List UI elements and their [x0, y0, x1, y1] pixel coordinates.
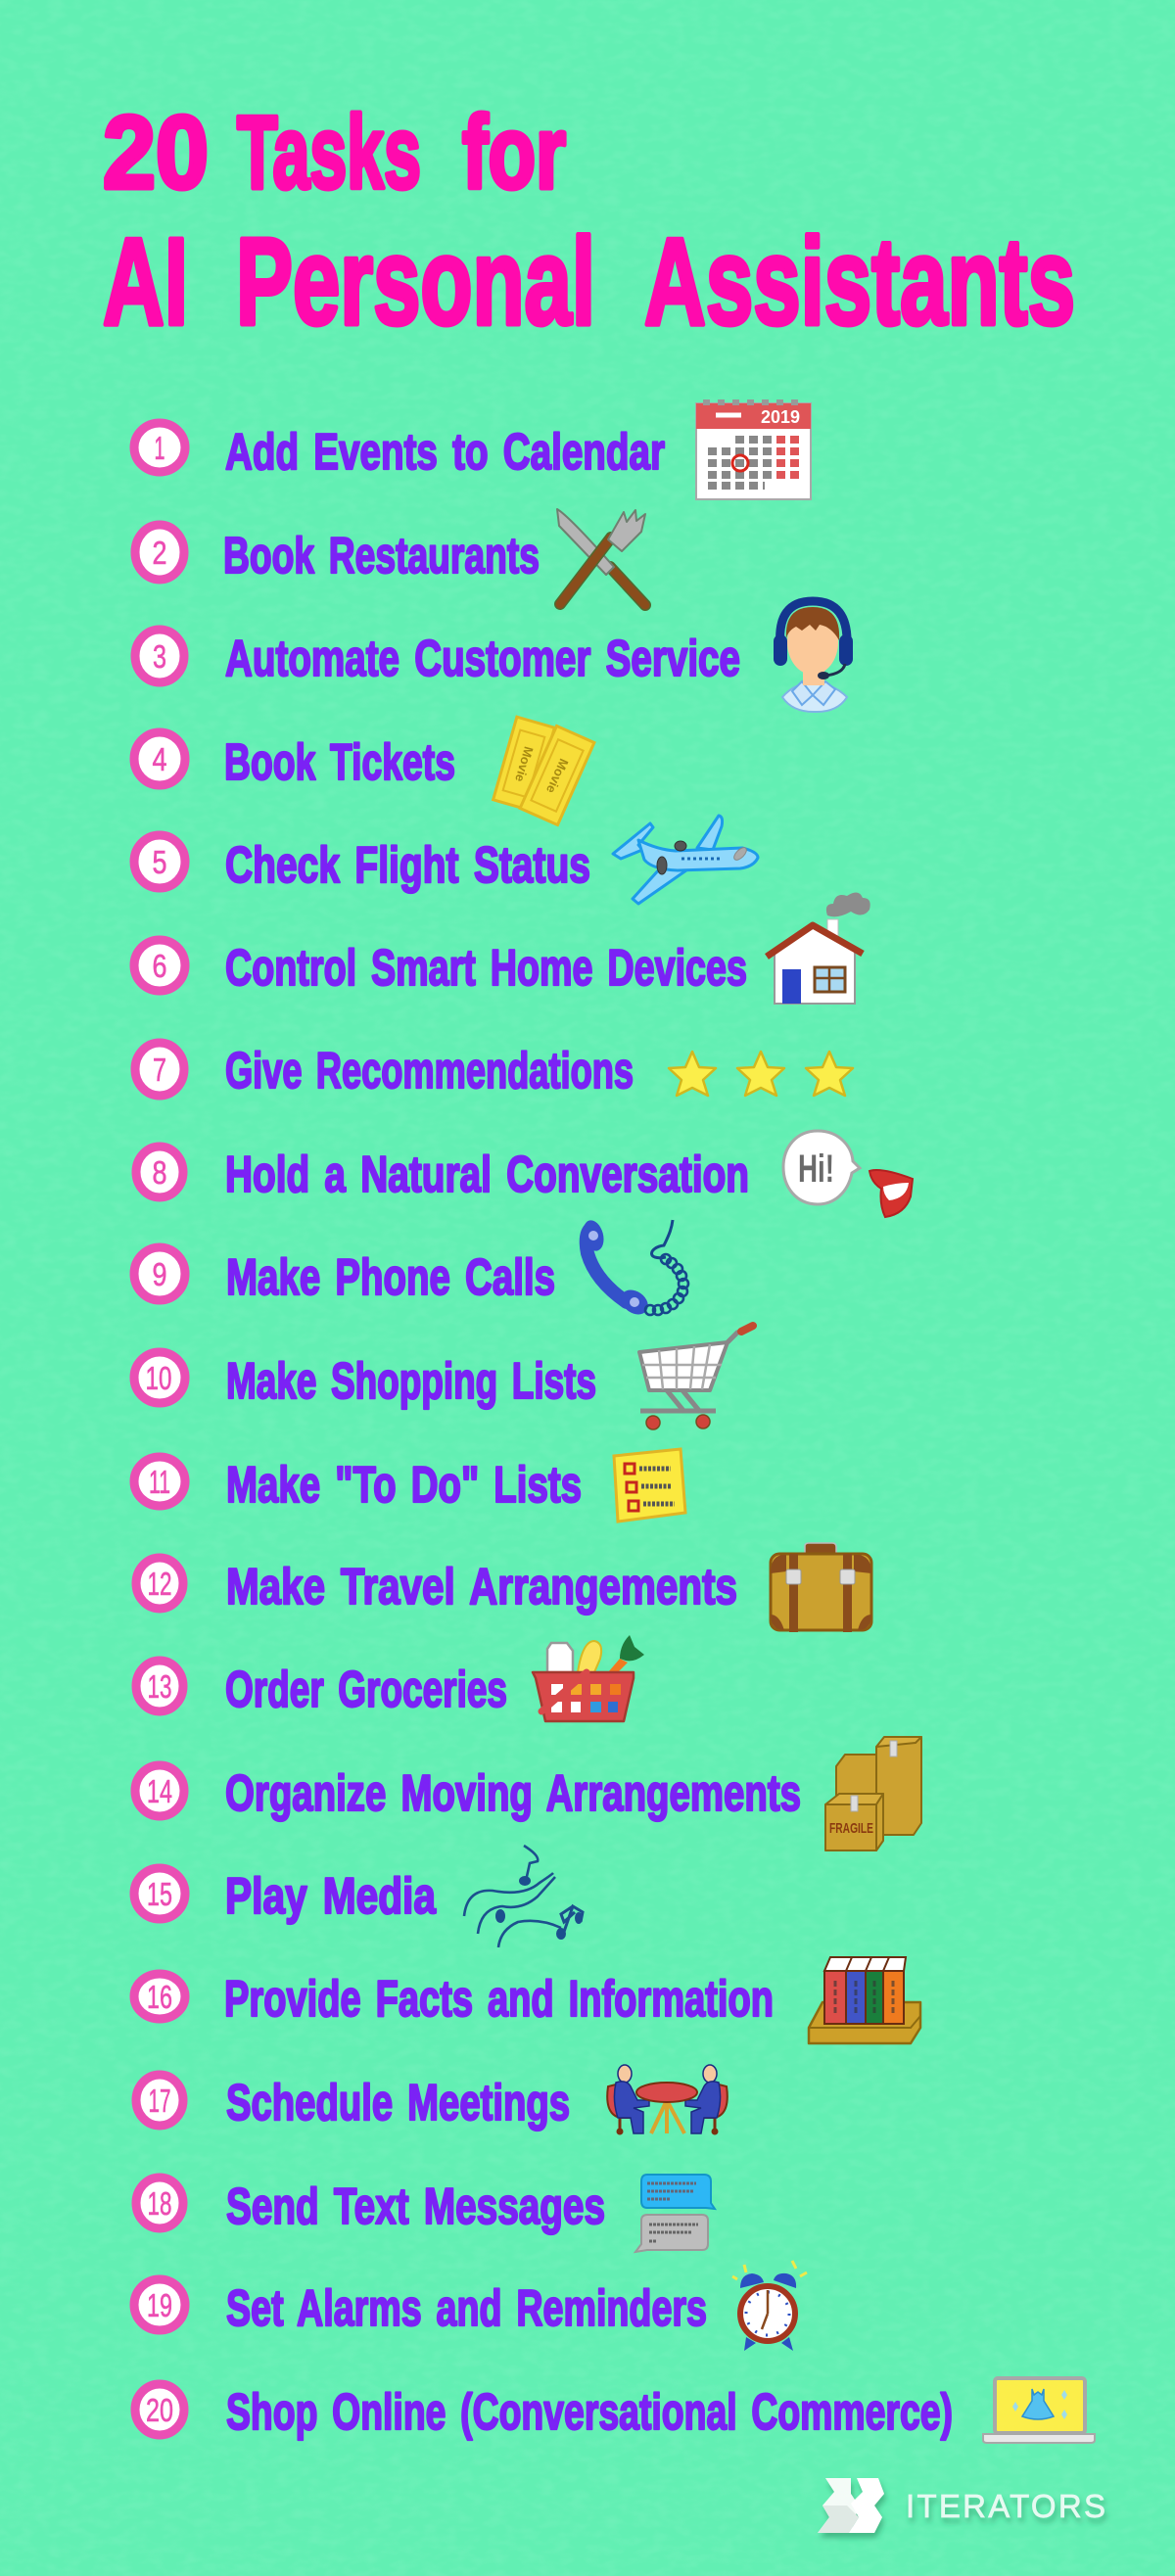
- number badge 6: 6: [153, 948, 166, 984]
- label: make to do lists: Make "To Do" Lists: [226, 1457, 582, 1514]
- icon: knife and fork: [557, 509, 645, 605]
- row 11: [134, 1449, 685, 1522]
- row 17: [136, 2065, 728, 2134]
- icon: customer service agent: [774, 601, 853, 712]
- icon: talking mouth: [870, 1170, 913, 1217]
- label: order groceries: Order Groceries: [225, 1662, 507, 1718]
- title line 1: for: [462, 95, 566, 211]
- icon: books: [809, 1957, 920, 2043]
- icon: calendar: [696, 402, 811, 499]
- title line 2: Personal: [236, 212, 595, 351]
- number badge 14: [135, 1765, 184, 1816]
- icon: speech bubble: Hi!: [798, 1147, 834, 1191]
- number badge 14: 14: [147, 1773, 172, 1809]
- icon: house: [767, 892, 870, 1004]
- row 12: [136, 1543, 871, 1632]
- label: provide facts and information: Provide Facts and Information: [224, 1971, 774, 2028]
- label: control smart home devices: Control Smart Home Devices: [225, 940, 747, 997]
- row 2: [135, 509, 645, 605]
- number badge 19: 19: [147, 2287, 172, 2323]
- logo wordmark: ITERATORS: [906, 2488, 1105, 2524]
- number badge 1: 1: [155, 430, 164, 466]
- row 7: [135, 1043, 853, 1100]
- number badge 18: 18: [147, 2185, 172, 2222]
- number badge 4: 4: [153, 741, 166, 777]
- title: [103, 95, 1075, 351]
- icon: telephone: [580, 1218, 688, 1320]
- number badge 8: [136, 1147, 183, 1197]
- icon: three stars: [669, 1052, 853, 1096]
- row 19: [134, 2261, 807, 2351]
- icon: laptop with dress: [983, 2378, 1095, 2443]
- label: check flight status: Check Flight Status: [225, 837, 590, 894]
- label: schedule meetings: Schedule Meetings: [226, 2075, 570, 2131]
- icon: moving boxes: [825, 1737, 921, 1850]
- icon: tickets: Movie: [543, 757, 572, 795]
- row 8: [136, 1131, 913, 1217]
- icon: shopping cart: [639, 1326, 753, 1429]
- number badge 19: [134, 2279, 185, 2330]
- number badge 17: [136, 2075, 183, 2126]
- number badge 2: [135, 525, 184, 580]
- number badge 10: [134, 1352, 185, 1403]
- label: make shopping lists: Make Shopping Lists: [226, 1353, 596, 1410]
- number badge 3: 3: [153, 638, 166, 675]
- title line 1: 20: [103, 95, 209, 211]
- row 16: [134, 1957, 920, 2043]
- row 6: [134, 892, 870, 1004]
- title line 1: [103, 95, 566, 211]
- number badge 20: [135, 2384, 184, 2435]
- icon: alarm clock: [732, 2261, 807, 2351]
- number badge 20: 20: [146, 2392, 173, 2428]
- row 10: [134, 1326, 753, 1429]
- title line 2: AI: [103, 212, 188, 351]
- row 4: [134, 717, 594, 825]
- number badge 9: 9: [153, 1256, 166, 1292]
- icon: moving boxes: FRAGILE: [829, 1820, 873, 1837]
- icon: tickets: [494, 717, 594, 825]
- label: make phone calls: Make Phone Calls: [226, 1249, 555, 1306]
- number badge 17: 17: [149, 2083, 170, 2119]
- icon: music notes: [464, 1846, 583, 1947]
- row 13: [136, 1635, 644, 1721]
- number badge 8: 8: [153, 1154, 166, 1191]
- row 15: [134, 1846, 583, 1947]
- icon: to do note: [614, 1449, 685, 1522]
- row 9: [134, 1218, 688, 1320]
- number badge 9: [134, 1247, 185, 1300]
- label: add events: Add Events to Calendar: [225, 424, 665, 481]
- number badge 1: [134, 423, 185, 472]
- label: send text messages: Send Text Messages: [226, 2178, 605, 2235]
- number badge 4: [134, 732, 185, 785]
- icon: meeting at table: [607, 2065, 728, 2134]
- number badge 6: [134, 940, 185, 991]
- icon: calendar: 2019: [761, 407, 800, 427]
- label: set alarms and reminders: Set Alarms and Reminders: [226, 2280, 707, 2337]
- number badge 10: 10: [145, 1360, 172, 1396]
- number badge 11: [134, 1457, 185, 1506]
- number badge 7: [135, 1043, 184, 1096]
- number badge 2: 2: [153, 535, 166, 571]
- number badge 5: 5: [153, 844, 166, 880]
- logo mark: [818, 2478, 884, 2533]
- label: book restaurants: Book Restaurants: [223, 528, 540, 585]
- number badge 12: [136, 1558, 183, 1609]
- number badge 12: 12: [147, 1566, 172, 1602]
- row 20: [135, 2378, 1095, 2443]
- number badge 16: [134, 1974, 185, 2019]
- number badge 13: [136, 1661, 183, 1711]
- number badge 15: 15: [147, 1876, 172, 1912]
- label: organize moving arrangements: Organize Moving Arrangements: [225, 1765, 801, 1822]
- row 3: [135, 601, 853, 712]
- label: make travel arrangements: Make Travel Arrangements: [226, 1559, 737, 1616]
- number badge 7: 7: [153, 1052, 166, 1088]
- label: play media: Play Media: [225, 1868, 437, 1925]
- row 14: [135, 1737, 921, 1850]
- number badge 11: 11: [149, 1464, 170, 1500]
- title line 2: [103, 212, 1075, 351]
- label: automate customer service: Automate Customer Service: [225, 631, 740, 687]
- icon: tickets: Movie: [512, 745, 537, 783]
- icon: grocery basket: [533, 1635, 644, 1721]
- number badge 3: [135, 630, 184, 682]
- row 5: [134, 816, 758, 904]
- label: hold a natural conversation: Hold a Natural Conversation: [225, 1147, 749, 1203]
- icon: speech bubble: [783, 1131, 860, 1204]
- number badge 5: [134, 835, 185, 888]
- number badge 15: [134, 1868, 185, 1919]
- label: book tickets: Book Tickets: [224, 734, 455, 791]
- logo: iterators: [818, 2478, 1105, 2533]
- row 1: [134, 402, 811, 499]
- icon: airplane: [613, 816, 758, 904]
- number badge 13: 13: [147, 1668, 172, 1705]
- label: give recommendations: Give Recommendations: [225, 1043, 634, 1100]
- title line 1: Tasks: [237, 95, 421, 211]
- number badge 18: [136, 2178, 183, 2228]
- number badge 16: 16: [147, 1979, 172, 2015]
- row 18: [136, 2175, 715, 2252]
- icon: suitcase: [771, 1543, 871, 1632]
- icon: text messages: [635, 2175, 715, 2252]
